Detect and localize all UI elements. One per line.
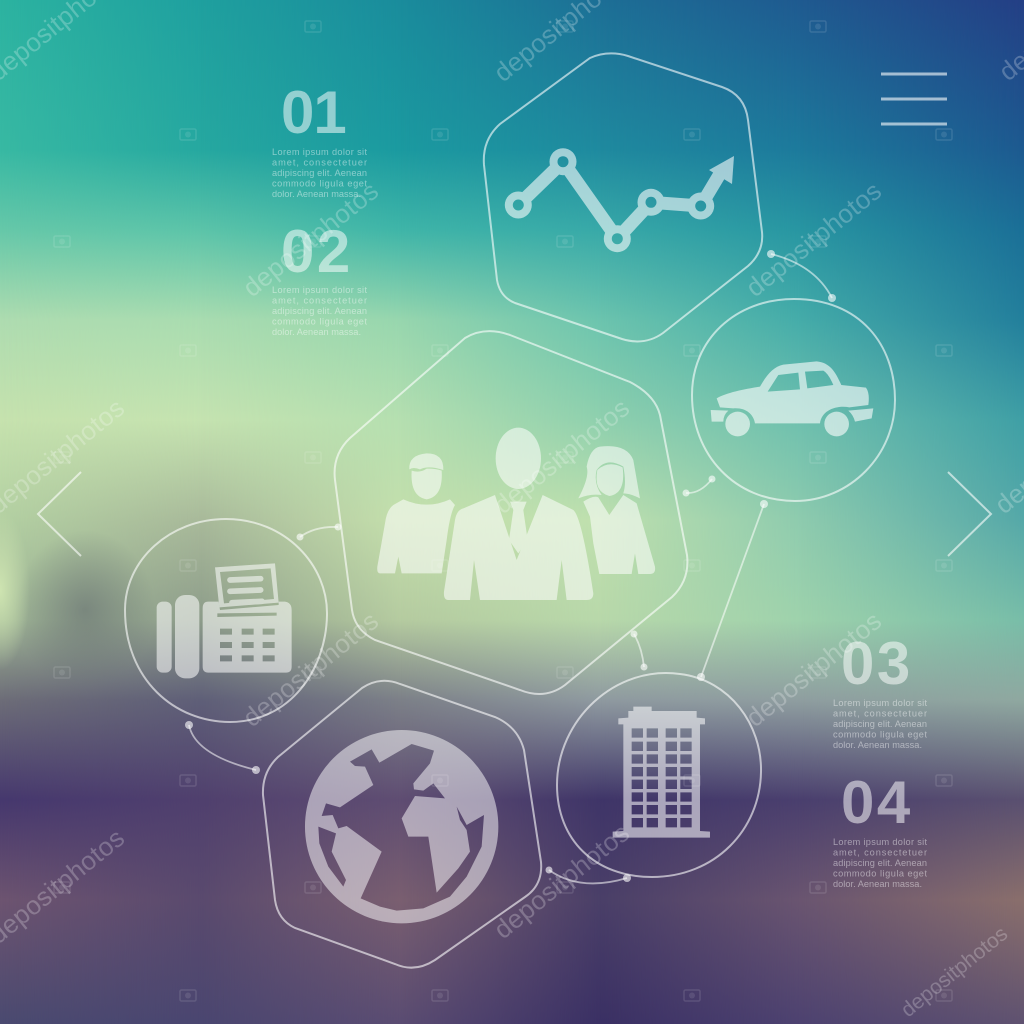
block 03: dolor. Aenean massa.	[833, 740, 922, 750]
block 03: amet, consectetuer	[833, 708, 927, 718]
block 04: Lorem ipsum dolor sit	[833, 837, 927, 847]
connector: chart to car	[767, 250, 836, 302]
block 02: amet, consectetuer	[272, 296, 367, 306]
block 04: dolor. Aenean massa.	[833, 879, 922, 889]
watermarks: depositphotos	[488, 393, 635, 520]
connector: fax to team	[296, 524, 342, 540]
block 01: 01	[281, 79, 346, 146]
icon: fax machine	[157, 563, 292, 678]
block 03: Lorem ipsum dolor sit	[833, 698, 927, 708]
block 04: 04	[841, 769, 913, 836]
block 04: adipiscing elit. Aenean	[833, 858, 927, 868]
block 02: 02	[281, 218, 353, 285]
panel: chart hexagon	[484, 53, 762, 341]
block 03: adipiscing elit. Aenean	[833, 719, 927, 729]
watermarks: depositphotos	[740, 176, 887, 303]
block 01: Lorem ipsum dolor sit	[272, 147, 367, 157]
block 03: commodo ligula eget	[833, 730, 927, 740]
block 02: adipiscing elit. Aenean	[272, 306, 367, 316]
block 02: commodo ligula eget	[272, 316, 367, 326]
watermarks: depositphotos	[237, 606, 384, 733]
panel: fax circle	[125, 519, 327, 722]
panel: globe hexagon	[263, 681, 541, 968]
block 02: Lorem ipsum dolor sit	[272, 285, 367, 295]
watermarks: depositphotos	[897, 922, 1012, 1022]
icon: car	[711, 361, 873, 436]
left arrow	[38, 472, 81, 556]
block 01	[272, 79, 367, 199]
icon: rising line chart	[505, 148, 734, 252]
icon: globe	[305, 730, 498, 923]
connector: team to building	[630, 630, 648, 670]
block 04: amet, consectetuer	[833, 848, 927, 858]
right arrow	[948, 472, 991, 556]
block 03: 03	[841, 630, 913, 697]
block 02: dolor. Aenean massa.	[272, 327, 361, 337]
block 01: commodo ligula eget	[272, 178, 367, 188]
watermarks: depositphotos	[237, 176, 384, 303]
block 01: dolor. Aenean massa.	[272, 189, 361, 199]
watermarks: depositphotos	[740, 606, 887, 733]
icon: three people	[377, 428, 655, 600]
block 04: commodo ligula eget	[833, 868, 927, 878]
menu icon	[881, 74, 947, 124]
connector: fax to globe	[185, 721, 260, 774]
block 03	[833, 630, 927, 750]
block 01: adipiscing elit. Aenean	[272, 168, 367, 178]
connector: car to building	[697, 500, 768, 681]
connector: globe to building	[546, 866, 631, 883]
panel: team hexagon	[335, 331, 687, 694]
block 02	[272, 218, 367, 337]
connector: team to car	[682, 476, 716, 496]
block 01: amet, consectetuer	[272, 158, 367, 168]
panel: car circle	[692, 299, 895, 501]
block 04	[833, 769, 927, 889]
panel: building circle	[557, 673, 761, 877]
watermarks: depositphotos	[488, 818, 635, 945]
icon: office building	[613, 707, 710, 838]
